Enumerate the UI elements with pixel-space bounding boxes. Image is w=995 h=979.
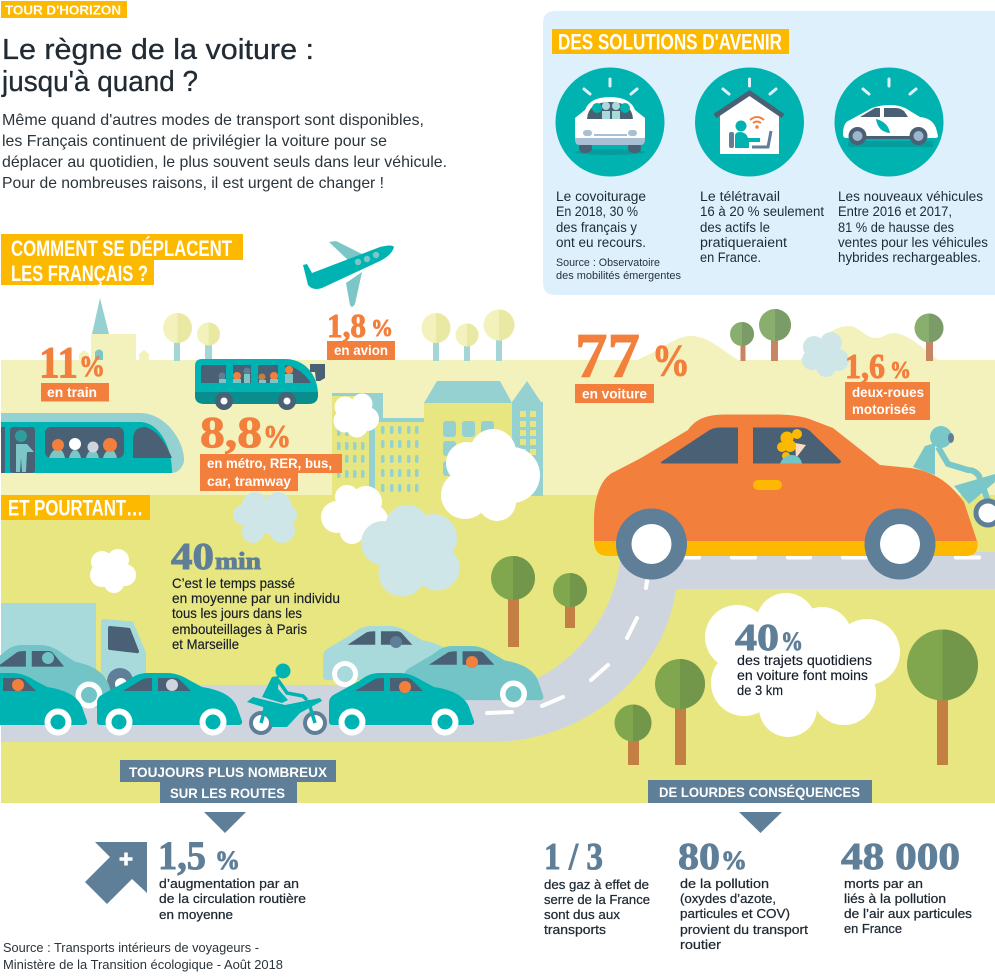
stat: 1,8 % en avion: % <box>371 316 393 342</box>
text: télétravail <box>700 189 824 265</box>
text: nouveaux véhicules: Entre 2016 et 2017, <box>838 204 952 219</box>
stat: 48 000 <box>841 836 973 936</box>
stat: 1,6 % deux-roues <box>845 347 930 420</box>
stat: 48 000: en France <box>844 921 902 936</box>
stat: 11 % en train <box>39 338 109 402</box>
icon: télétravail house <box>695 68 804 176</box>
stat: 40 % trajets: en voiture font moins <box>737 667 868 683</box>
text: covoiturage: ont eu recours. <box>556 235 646 250</box>
stat: 80 %: (oxydes d’azote, <box>680 891 776 906</box>
heading: comment se déplacent: LES FRANÇAIS ? <box>11 261 148 286</box>
stat: 40 min: et Marseille <box>172 636 239 652</box>
stat: 1/3: sont dus aux <box>544 907 621 922</box>
intro text: Pour de nombreuses raisons, il est urgent de changer ! <box>2 175 384 192</box>
text: covoiturage: des mobilités émergentes <box>556 270 681 282</box>
intro text <box>2 112 447 192</box>
title: jusqu'à quand ? <box>1 66 198 98</box>
title <box>1 34 314 98</box>
stat: 77 % en voiture: % <box>652 336 690 385</box>
arrow: down, routes <box>204 812 246 833</box>
stat: 40 min: en moyenne par un individu <box>172 590 340 606</box>
text: covoiturage: des français y <box>556 220 637 235</box>
stat: 48 000: de l’air aux particules <box>844 906 973 921</box>
text: covoiturage <box>556 189 681 282</box>
stat: 80 % <box>678 836 808 952</box>
text: nouveaux véhicules: Les nouveaux véhicules <box>838 189 983 204</box>
heading: et pourtant: ET POURTANT… <box>8 496 143 520</box>
stat: 40 min: 40 <box>171 536 214 578</box>
motorbike in traffic <box>247 664 325 733</box>
icon: up arrow <box>85 842 147 904</box>
background scenery <box>1 309 995 803</box>
stat: 1,5 %: d’augmentation par an <box>159 876 299 891</box>
stat: 1/3: 1 / 3 <box>544 836 603 878</box>
stat: 1,5 %: de la circulation routière <box>159 891 306 906</box>
road <box>1 552 995 742</box>
stat: 1/3: transports <box>544 922 607 937</box>
stat: 1,6 % deux-roues: % <box>890 358 911 384</box>
icon: hybrid car <box>834 68 944 176</box>
stat: 1/3 <box>544 836 650 937</box>
stat: 40 % trajets: des trajets quotidiens <box>737 652 872 668</box>
stat: 11 % en train: % <box>79 350 105 383</box>
label: toujours plus nombreux: SUR LES ROUTES <box>170 785 285 801</box>
stat: 40 % trajets <box>735 617 872 698</box>
stat: 11 % en train: 11 <box>39 338 78 387</box>
stat: 40 min: embouteillages à Paris <box>172 621 307 637</box>
stat: 80 %: routier <box>680 937 722 952</box>
bus <box>195 359 325 410</box>
label: de lourdes conséquences: DE LOURDES CONSÉQUENCES <box>659 784 860 800</box>
stat: 1/3: des gaz à effet de <box>544 877 649 892</box>
traffic cars <box>0 626 543 736</box>
title: Le règne de la voiture : <box>2 34 314 66</box>
stat: 1,6 % deux-roues: deux-roues <box>852 384 924 400</box>
white cloud: 40% bubble <box>705 593 900 737</box>
panel: solutions d'avenir: DES SOLUTIONS D'AVENIR <box>558 30 782 54</box>
text: nouveaux véhicules: ventes pour les véhicules <box>838 235 988 250</box>
stat: 40 min: min <box>215 549 261 575</box>
stat: 1,8 % en avion: en avion <box>334 342 388 358</box>
train <box>1 413 184 473</box>
label: toujours plus nombreux: TOUJOURS PLUS NOMBREUX <box>129 764 328 780</box>
stat: 40 min: tous les jours dans les <box>172 605 302 621</box>
stat: 40 % trajets: % <box>781 627 803 656</box>
clouds <box>90 332 849 596</box>
truck <box>1 603 146 694</box>
source <box>3 940 283 972</box>
stat: 11 % en train: en train <box>47 384 97 400</box>
heading: comment se déplacent <box>1 234 243 286</box>
distant motorbike <box>913 426 995 525</box>
label: tour d'horizon: TOUR D'HORIZON <box>5 2 121 18</box>
label: de lourdes conséquences <box>648 780 872 803</box>
stat: 40 min: C’est le temps passé <box>172 575 295 591</box>
city buildings <box>332 381 543 496</box>
intro text: Même quand d'autres modes de transport sont disponibles, <box>2 112 424 129</box>
stat: 8,8 % transports: 8,8 <box>200 408 262 457</box>
icon: covoiturage car <box>556 68 664 176</box>
stat: 80 %: provient du transport <box>680 922 808 937</box>
stat: 8,8 % transports: car, tramway <box>207 473 291 489</box>
text: télétravail: pratiqueraient <box>700 235 787 250</box>
stat: 40 % trajets: de 3 km <box>737 682 783 698</box>
stat: 40 % trajets: 40 <box>735 617 779 659</box>
text: nouveaux véhicules: hybrides rechargeables. <box>838 250 981 265</box>
stat: 48 000: liés à la pollution <box>844 891 946 906</box>
stat: 1,6 % deux-roues: motorisés <box>852 401 916 417</box>
icon: plane <box>303 241 394 307</box>
text: nouveaux véhicules: 81 % de hausse des <box>838 220 954 235</box>
orange car <box>594 414 978 580</box>
stat: 1,5 %: % <box>215 846 240 875</box>
stat: 8,8 % transports: en métro, RER, bus, <box>207 455 332 471</box>
stat: 80 %: 80 <box>678 836 720 878</box>
text: télétravail: en France. <box>700 250 761 265</box>
stat: 1,6 % deux-roues: 1,6 <box>845 347 885 386</box>
stat: 77 % en voiture: en voiture <box>582 386 647 402</box>
text: télétravail: 16 à 20 % seulement <box>700 204 824 219</box>
stat: 1,5 %: 1,5 <box>158 833 206 878</box>
label: toujours plus nombreux <box>120 760 336 803</box>
intro text: déplacer au quotidien, le plus souvent seuls dans leur véhicule. <box>2 154 447 171</box>
stat: 1,8 % en avion: 1,8 <box>327 308 366 345</box>
intro text: les Français continuent de privilégier la voiture pour se <box>2 133 387 150</box>
stat: 40 min <box>171 536 340 652</box>
stat: 1,5 % <box>158 833 306 922</box>
text: covoiturage: Source : Observatoire <box>556 257 660 269</box>
stat: 48 000: 48 000 <box>841 836 960 878</box>
text: nouveaux véhicules <box>838 189 988 265</box>
stat: 77 % en voiture: 77 <box>575 320 640 391</box>
stat: 77 % en voiture <box>575 320 690 403</box>
source: Source : Transports intérieurs de voyageurs - <box>3 940 259 955</box>
text: télétravail: Le télétravail <box>700 189 780 204</box>
stat: 8,8 % transports: % <box>263 418 291 454</box>
stat: 1,8 % en avion <box>327 308 395 360</box>
stat: 48 000: morts par an <box>844 876 923 891</box>
stat: 1/3: serre de la France <box>544 892 650 907</box>
church <box>79 298 149 360</box>
trees <box>491 556 978 765</box>
text: covoiturage: En 2018, 30 % <box>556 204 638 219</box>
panel: solutions d'avenir <box>543 11 995 295</box>
stat: 80 %: % <box>721 846 747 875</box>
source: Ministère de la Transition écologique - Août 2018 <box>3 957 283 972</box>
stat: 8,8 % transports <box>200 408 342 491</box>
heading: comment se déplacent: COMMENT SE DÉPLACENT <box>11 236 232 261</box>
text: télétravail: des actifs le <box>700 220 770 235</box>
stat: 1,5 %: en moyenne <box>159 907 233 922</box>
stat: 80 %: particules et COV) <box>680 906 790 921</box>
arrow: down, conséquences <box>739 812 782 833</box>
stat: 80 %: de la pollution <box>680 876 769 891</box>
text: covoiturage: Le covoiturage <box>556 189 646 204</box>
